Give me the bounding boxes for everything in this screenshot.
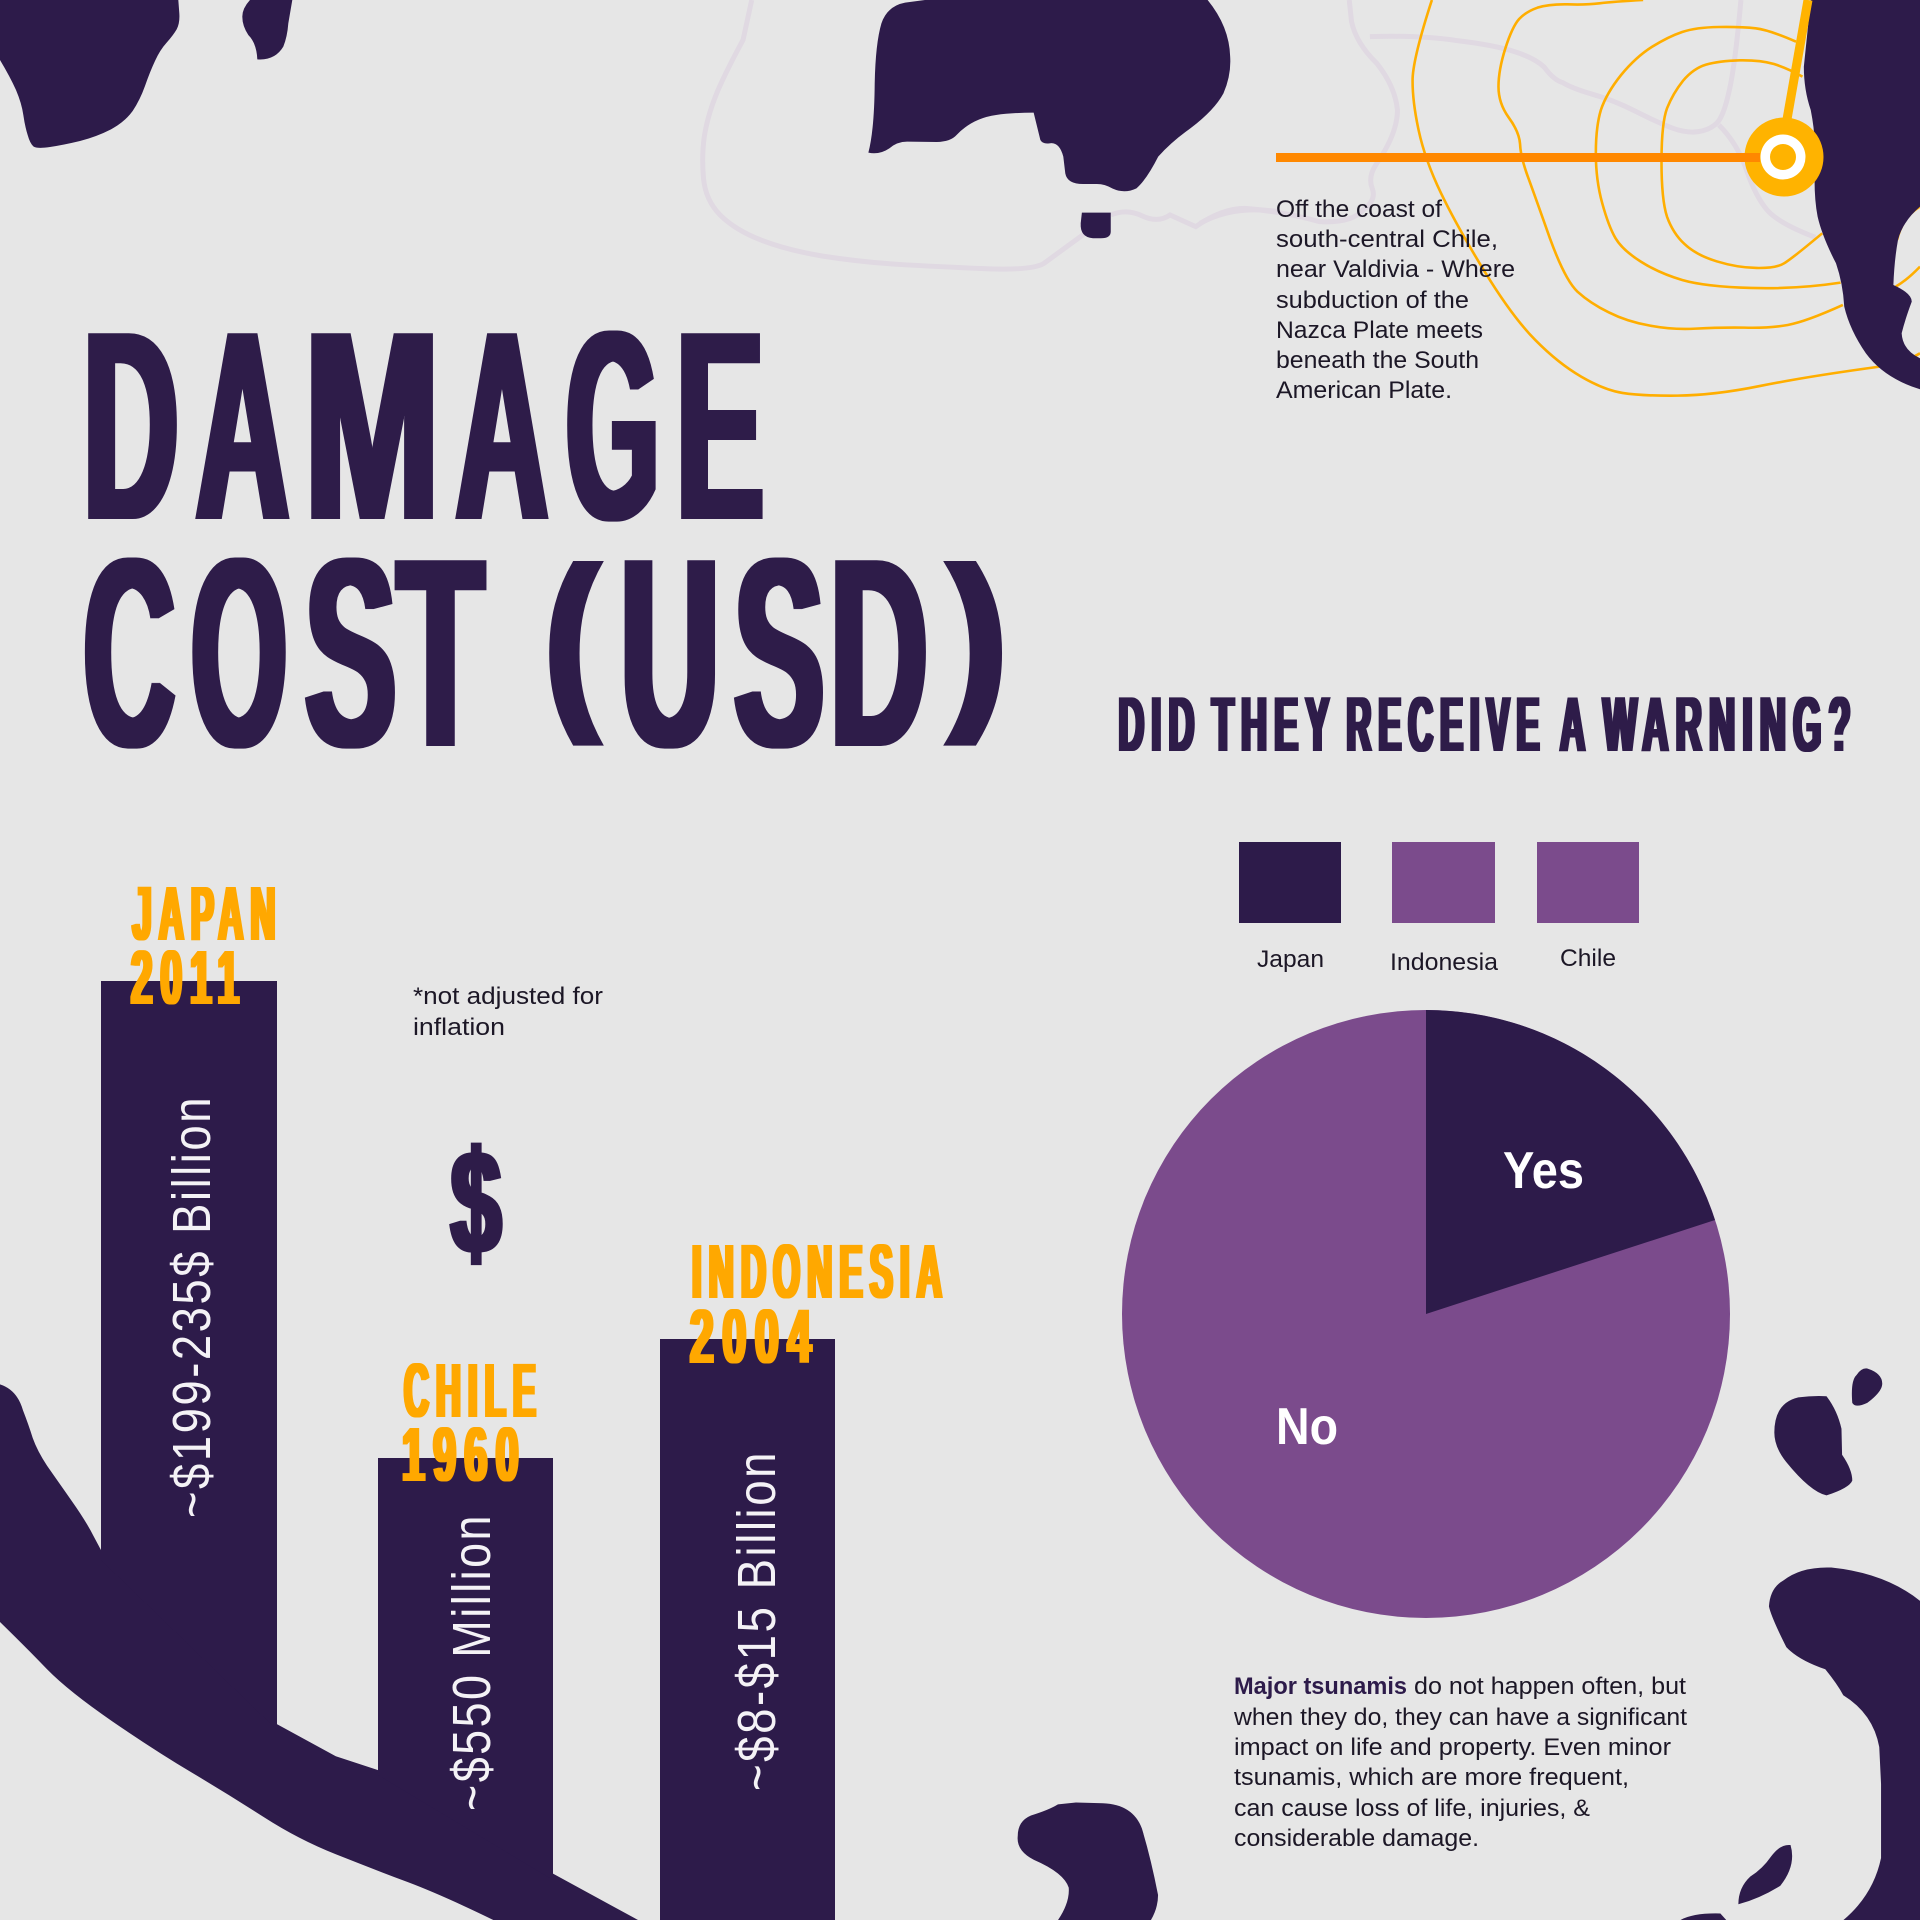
bar: Indonesia: 2004 <box>690 1294 820 1380</box>
body paragraph: major tsunamis: can cause loss of life, injuries, & <box>1234 1795 1590 1822</box>
location description: subduction of the <box>1276 287 1469 314</box>
title: O <box>191 503 287 804</box>
title: A <box>456 276 548 577</box>
bar: Indonesia: ~$8-$15 Billion <box>727 1450 787 1791</box>
title: G <box>566 276 659 577</box>
bar chart: damage cost <box>101 871 949 1920</box>
footnote <box>413 983 603 1041</box>
bar: Chile: 1960 <box>402 1412 527 1498</box>
footnote: *not adjusted for <box>413 983 603 1010</box>
pie legend <box>1239 842 1639 976</box>
warning heading: DID <box>1118 680 1202 768</box>
bar: Chile: ~$550 Million <box>442 1513 502 1811</box>
title: S <box>305 503 396 804</box>
location description: Nazca Plate meets <box>1276 317 1483 344</box>
title: M <box>304 276 440 577</box>
epicentre marker with leader lines <box>1276 0 1824 196</box>
body paragraph: major tsunamis <box>1233 1673 1687 1852</box>
location description: south-central Chile, <box>1276 226 1498 253</box>
footnote: inflation <box>413 1014 505 1041</box>
map: earthquake contour lines <box>1413 0 1920 396</box>
location description: Off the coast of <box>1276 196 1442 223</box>
location description: beneath the South <box>1276 347 1479 374</box>
infographic canvas: INDONESIA <box>692 1229 949 1315</box>
title: D <box>83 276 178 577</box>
warning heading: A <box>1560 680 1591 768</box>
title: A <box>196 276 289 577</box>
warning heading: RECEIVE <box>1346 680 1546 768</box>
warning heading: THEY <box>1212 680 1336 768</box>
title: U <box>620 503 719 804</box>
pie legend: Chile <box>1560 945 1616 972</box>
pie chart <box>1122 1010 1730 1618</box>
title: ( <box>545 526 600 746</box>
body paragraph: major tsunamis: considerable damage. <box>1234 1825 1479 1852</box>
title <box>83 276 1007 804</box>
islands: bottom right <box>1018 1368 1920 1920</box>
bar chart: damage cost: CHILE <box>404 1348 543 1434</box>
bottom-left landmass <box>0 1384 638 1920</box>
bar: Japan <box>101 871 282 1730</box>
title: ) <box>947 526 1007 746</box>
pie chart: No <box>1276 1398 1338 1456</box>
bar chart: damage cost: JAPAN <box>132 871 282 957</box>
bar: Chile <box>378 1348 553 1880</box>
title: S <box>734 503 824 804</box>
landmass: top centre <box>868 0 1230 238</box>
bar: Indonesia <box>660 1229 949 1920</box>
bar: Japan: 2011 <box>131 935 247 1021</box>
location description <box>1276 196 1515 404</box>
title: D <box>830 503 928 804</box>
landmass: South America coast <box>1804 0 1920 389</box>
body paragraph: major tsunamis: tsunamis, which are more frequent, <box>1234 1764 1629 1791</box>
body paragraph: major tsunamis: impact on life and property. Even minor <box>1234 1734 1671 1761</box>
landmass: top left <box>0 0 292 148</box>
icon: dollar sign: $ <box>451 1118 501 1286</box>
pie legend: Japan <box>1257 946 1324 973</box>
bar: Japan: ~$199-235$ Billion <box>162 1095 222 1518</box>
location description: near Valdivia - Where <box>1276 256 1515 283</box>
title: T <box>397 503 484 804</box>
body paragraph: major tsunamis: Major tsunamis <box>1234 1673 1407 1700</box>
map: faint fault lines <box>703 0 1815 269</box>
pie chart: Yes <box>1503 1142 1584 1200</box>
body paragraph: major tsunamis: when they do, they can have a significant <box>1233 1704 1687 1731</box>
title: C <box>84 503 175 804</box>
pie legend: Indonesia <box>1390 949 1499 976</box>
title: E <box>676 276 764 577</box>
body paragraph: major tsunamis: do not happen often, but <box>1414 1673 1686 1700</box>
location description: American Plate. <box>1276 377 1452 404</box>
